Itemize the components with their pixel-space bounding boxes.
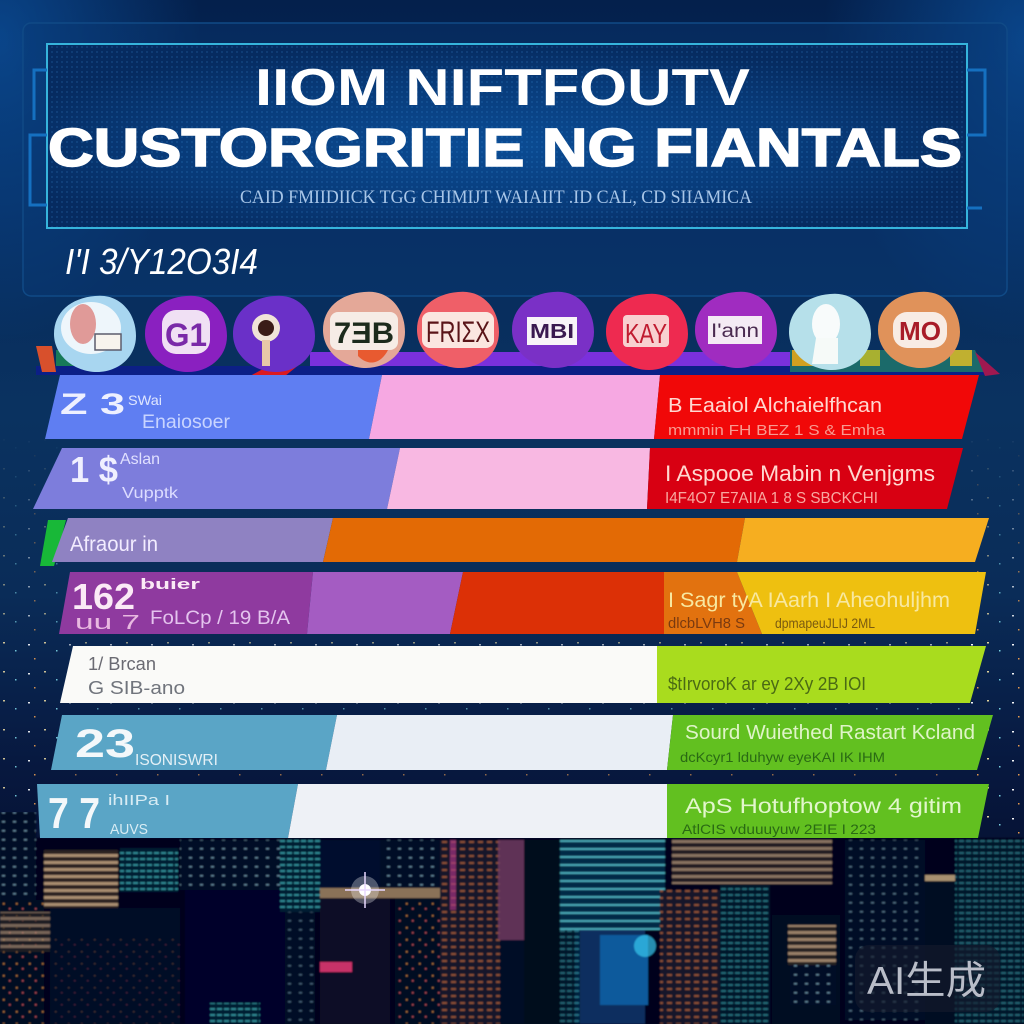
watermark (855, 945, 1000, 1012)
icon: Ioan badge (695, 292, 777, 368)
panel: title box (30, 44, 985, 228)
bar row 1: Enaiosoer (142, 412, 231, 433)
icon: keyhole figure (233, 296, 315, 372)
bar row 4: dpmapeuJLIJ 2ML (775, 615, 875, 631)
bar row 6: ISONISWRI (135, 752, 218, 769)
panel: outer header frame (23, 23, 1007, 296)
cityscape (0, 812, 1024, 1024)
icon: FRIX badge (417, 292, 499, 368)
icon: Ioan badge: I'ann (711, 321, 759, 342)
star flare (345, 872, 385, 908)
bar row 5 (60, 646, 986, 703)
icon: 7AB badge: 7ƎB (334, 317, 394, 350)
bar row 2: 1 $ (70, 449, 118, 490)
bar row 2: Vupptk (122, 485, 179, 502)
bar row 6 (51, 715, 993, 770)
bar row 2: I4F4O7 E7AIIA 1 8 S SBCKCHI (665, 490, 878, 507)
icon: MBI badge: MBI (530, 321, 574, 343)
bar row 2 (33, 448, 963, 509)
icon: FRIX badge: FRIΣX (426, 316, 490, 349)
bar row 4: dlcbLVH8 S (668, 615, 745, 632)
bar row 4: 162 (72, 576, 135, 617)
icon: MO badge: MO (899, 316, 941, 346)
bar row 3: Afraour in (70, 533, 158, 556)
bar row 6: Sourd Wuiethed Rastart Kcland (685, 722, 975, 744)
icon: person at desk (54, 296, 136, 372)
decorative band behind icons (36, 346, 1000, 376)
bar row 1: SWai (128, 392, 162, 408)
icon: KAY badge: KAY (625, 318, 667, 349)
bar row 4 (59, 572, 986, 634)
bar row 6: 23 (75, 722, 135, 766)
bar row 2: I Aspooe Mabin n Venjgms (665, 461, 935, 486)
icon row (54, 292, 960, 372)
title line 2: CUSTORGRITIE NG FIANTALS (48, 118, 962, 178)
bar row 1: B Eaaiol Alchaielfhcan (668, 395, 882, 417)
bar row 7: AUVS (110, 821, 148, 838)
bar row 7: AtlCIS vduuuyuw 2EIE I 223 (682, 821, 876, 837)
subtitle: CAID FMIIDIICK TGG CHIMIJT WAIAIIT .ID CAL, CD SIIAMICA (240, 187, 752, 208)
icon: keyhole silhouette (789, 294, 871, 370)
bar row 4: buier (140, 576, 200, 593)
icon: MO badge (878, 292, 960, 368)
bar row 7: 7 7 (48, 789, 100, 838)
bar row 1: Z 3 (60, 388, 125, 421)
watermark: AI生成 (867, 960, 986, 1003)
date label: I'I 3/Y12O3I4 (65, 241, 258, 282)
bar row 1: mmmin FH BEZ 1 S & Emha (668, 422, 886, 439)
icon: 7AB badge (323, 292, 405, 368)
bar row 1 (45, 375, 979, 439)
bar row 4: uu 7 (75, 612, 140, 634)
bar row 5: G SIB-ano (88, 678, 185, 698)
bar row 6: dcKcyr1 lduhyw eyeKAI IK IHM (680, 749, 885, 765)
bar row 4: I Sagr tyA IAarh I Aheohuljhm (668, 589, 950, 612)
icon: KAY badge (606, 294, 688, 370)
bar row 7 (37, 784, 989, 838)
bar row 4: FoLCp / 19 B/A (150, 608, 290, 629)
bar row 7: ApS Hotufhoptow 4 gitim (685, 795, 962, 818)
title line 1: IIOM NIFTFOUTV (255, 59, 750, 117)
bar row 3 (40, 518, 989, 566)
icon: MBI badge (512, 292, 594, 368)
icon: G1 badge (145, 296, 227, 372)
icon: G1 badge: G1 (165, 317, 207, 353)
bar row 5: $tIrvoroK ar ey 2Xy 2B IOI (668, 674, 866, 694)
bar row 2: Aslan (120, 451, 160, 468)
bar row 7: ihIIPa I (108, 792, 170, 809)
bar row 5: 1/ Brcan (88, 654, 156, 674)
